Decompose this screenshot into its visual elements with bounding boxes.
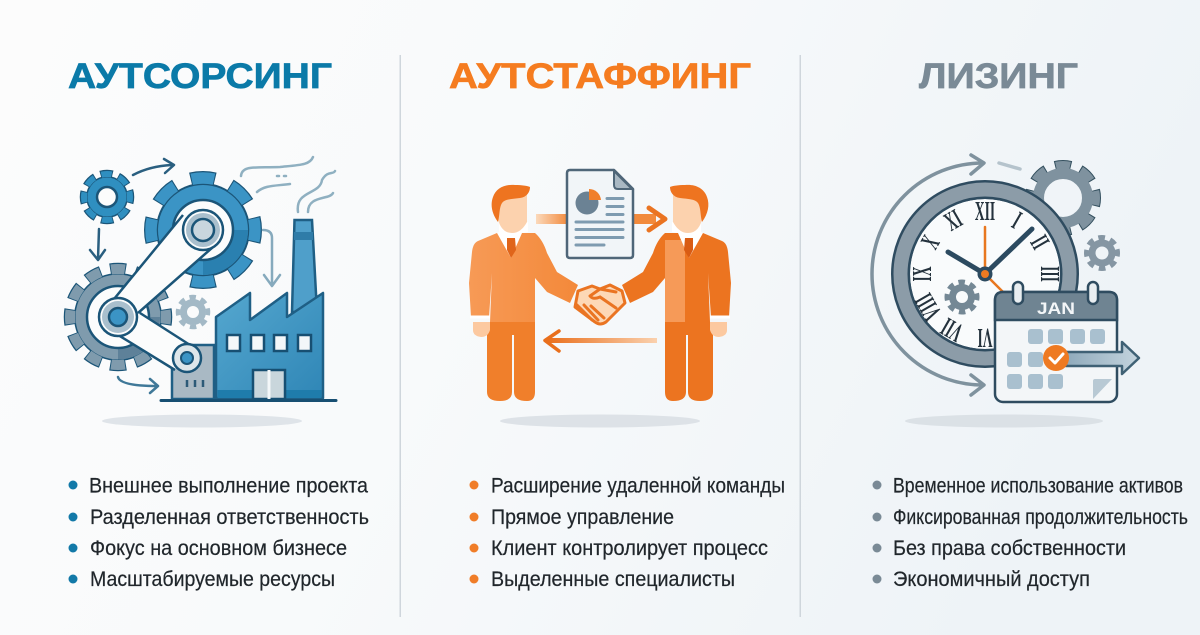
clock numerals: VII — [936, 312, 968, 348]
heading: outstaffing: АУТСТАФФИНГ — [449, 57, 751, 96]
illustration: handshake — [469, 170, 731, 428]
panel: outstaffing — [449, 57, 785, 591]
icon: ground line — [161, 399, 336, 402]
arrow: bottom gradient — [545, 331, 657, 351]
icon: left person — [469, 185, 578, 401]
bullet list: outsourcing: Разделенная ответственность — [90, 506, 369, 529]
panel: outsourcing — [68, 57, 369, 591]
icon: smoke lines — [241, 157, 335, 212]
clock numerals: III — [1035, 266, 1065, 282]
clock numerals: VI — [978, 323, 992, 353]
clock numerals — [907, 196, 1065, 353]
icon: belt — [105, 215, 213, 370]
icon: factory building — [216, 293, 323, 399]
icon: calendar — [995, 282, 1117, 402]
icon: document — [567, 170, 633, 258]
arrow: bottom — [118, 377, 158, 393]
icon: factory chimney — [292, 220, 317, 312]
clock numerals: X — [915, 230, 946, 254]
heading: outsourcing: АУТСОРСИНГ — [68, 57, 332, 96]
clock numerals: I — [1007, 206, 1027, 235]
arrow: top gradient — [536, 208, 665, 230]
illustration: clock and calendar — [872, 155, 1139, 428]
icon: right person — [622, 185, 731, 401]
bullet list: outsourcing: Внешнее выполнение проекта — [89, 474, 368, 498]
panel: leasing — [872, 57, 1188, 591]
bullet list: outstaffing — [470, 474, 785, 591]
bullet list: outsourcing: Масштабируемые ресурсы — [90, 568, 335, 591]
icon: pale gear — [178, 297, 208, 327]
icon: gear inside clock — [947, 282, 977, 312]
icon: calendar: JAN — [1037, 299, 1075, 318]
clock numerals: XII — [975, 196, 995, 226]
icon: large grey gear — [70, 269, 166, 365]
heading: leasing: ЛИЗИНГ — [919, 57, 1078, 96]
bullet list: outsourcing: Фокус на основном бизнесе — [90, 537, 347, 560]
bullet list: outstaffing: Выделенные специалисты — [491, 568, 735, 591]
icon: small grey building — [172, 345, 214, 399]
bullet list: outstaffing: Прямое управление — [491, 506, 674, 529]
bullet list: outstaffing: Клиент контролирует процесс — [491, 537, 768, 560]
icon: upper hub — [183, 210, 223, 250]
clock numerals: IX — [907, 266, 937, 281]
arrow: down left — [90, 229, 105, 260]
icon: small blue gear — [84, 174, 130, 220]
icon: circular arrow — [872, 155, 984, 395]
icon: small pulley — [173, 344, 201, 372]
arrow: calendar — [1066, 342, 1139, 374]
icon: large gear behind clock — [1030, 165, 1096, 231]
bullet list: outstaffing: Расширение удаленной команды — [491, 474, 785, 498]
clock numerals: II — [1024, 230, 1056, 254]
bullet list: outsourcing — [68, 474, 369, 591]
bullet list: leasing: Экономичный доступ — [893, 568, 1090, 591]
icon: lower hub — [99, 298, 137, 336]
clock hands — [948, 227, 1032, 292]
illustration: gears and factory — [70, 157, 336, 428]
clock numerals: VIII — [909, 288, 948, 326]
arrow: gear to factory — [263, 230, 280, 286]
icon: handshake — [575, 285, 625, 324]
icon: clock — [900, 190, 1070, 358]
bullet list: leasing: Без права собственности — [893, 537, 1126, 560]
clock numerals: XI — [939, 203, 967, 237]
bullet list: leasing — [872, 474, 1188, 591]
icon: small side gear — [1086, 238, 1118, 268]
icon: orange check — [1043, 345, 1069, 371]
arrow: top — [133, 159, 174, 175]
icon: large blue gear — [151, 178, 255, 282]
